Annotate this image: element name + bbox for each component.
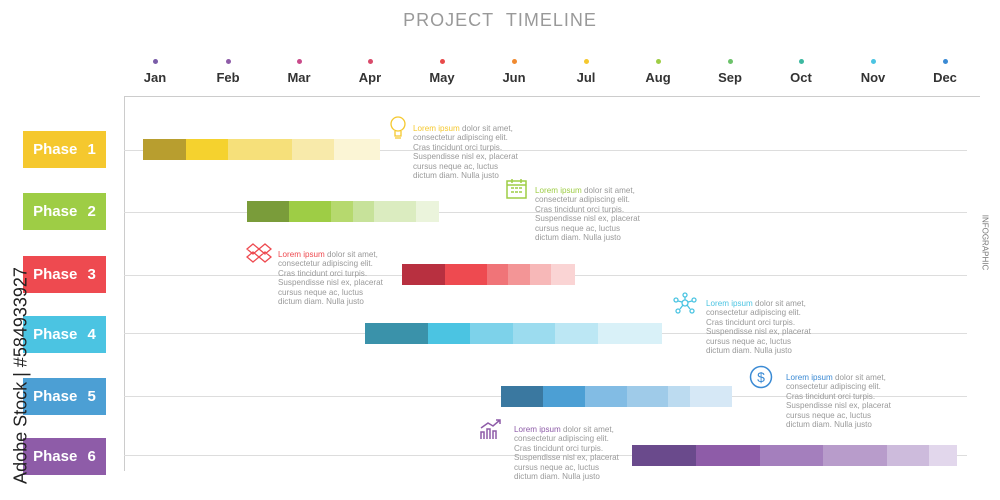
text phase 6: cursus neque ac, luctus: [514, 463, 599, 472]
month header: Feb: [216, 70, 240, 85]
month header: Mar: [287, 70, 311, 85]
month header: Aug: [645, 70, 671, 85]
phase 6 label: Phase 6: [33, 448, 96, 465]
text phase 2: Suspendisse nisl ex, placerat: [535, 214, 640, 223]
phase 3 label: Phase 3: [33, 266, 96, 283]
phase 4 label: Phase 4: [33, 326, 96, 343]
text phase 1: Cras tincidunt orci turpis.: [413, 143, 502, 152]
text phase 4: Suspendisse nisl ex, placerat: [706, 327, 811, 336]
text phase 1: Suspendisse nisl ex, placerat: [413, 152, 518, 161]
text phase 4: Cras tincidunt orci turpis.: [706, 318, 795, 327]
month header: Jan: [144, 70, 166, 85]
month header: Nov: [861, 70, 885, 85]
text phase 2: [535, 186, 640, 242]
text phase 3: consectetur adipiscing elit.: [278, 259, 373, 268]
text phase 6: Cras tincidunt orci turpis.: [514, 444, 603, 453]
text phase 1: [413, 124, 518, 180]
text phase 1: consectetur adipiscing elit.: [413, 133, 508, 142]
text phase 3: cursus neque ac, luctus: [278, 288, 363, 297]
icon: bulb: [390, 116, 406, 139]
side label: INFOGRAPHIC: [980, 215, 990, 270]
text phase 6: dictum diam. Nulla justo: [514, 472, 600, 481]
title: PROJECT TIMELINE: [403, 10, 597, 30]
text phase 3: Cras tincidunt orci turpis.: [278, 269, 367, 278]
text phase 4: consectetur adipiscing elit.: [706, 308, 801, 317]
text phase 4: [706, 299, 811, 355]
text phase 2: cursus neque ac, luctus: [535, 224, 620, 233]
text phase 4: Lorem ipsum dolor sit amet,: [706, 299, 806, 308]
text phase 5: cursus neque ac, luctus: [786, 411, 871, 420]
text phase 6: Suspendisse nisl ex, placerat: [514, 453, 619, 462]
text phase 5: dictum diam. Nulla justo: [786, 420, 872, 429]
text phase 2: Cras tincidunt orci turpis.: [535, 205, 624, 214]
text phase 2: consectetur adipiscing elit.: [535, 195, 630, 204]
text phase 2: Lorem ipsum dolor sit amet,: [535, 186, 635, 195]
icon: chart: [480, 419, 501, 439]
text phase 5: consectetur adipiscing elit.: [786, 382, 881, 391]
icon: network: [673, 292, 697, 314]
phase 1 label: Phase 1: [33, 141, 96, 158]
month header: Oct: [790, 70, 812, 85]
phase 1 label: [23, 131, 106, 168]
month header: Dec: [933, 70, 957, 85]
month header: Sep: [718, 70, 742, 85]
bar phase 1: [143, 139, 380, 160]
phase 2 label: [23, 193, 106, 230]
month header: Apr: [359, 70, 381, 85]
text phase 5: [786, 373, 891, 429]
icon: boxes: [246, 243, 272, 263]
month header: Jul: [577, 70, 595, 85]
bar phase 3: [402, 264, 575, 285]
bar phase 5: [501, 386, 732, 407]
watermark text: Adobe Stock | #584933927: [10, 267, 30, 484]
month header: Jun: [502, 70, 526, 85]
phase labels: [23, 131, 106, 475]
bar phase 4: [365, 323, 662, 344]
text phase 5: Lorem ipsum dolor sit amet,: [786, 373, 886, 382]
phase 5 label: [23, 378, 106, 415]
phase 2 label: Phase 2: [33, 203, 96, 220]
text phase 3: Lorem ipsum dolor sit amet,: [278, 250, 378, 259]
text phase 2: dictum diam. Nulla justo: [535, 233, 621, 242]
text phase 5: Suspendisse nisl ex, placerat: [786, 401, 891, 410]
text phase 3: Suspendisse nisl ex, placerat: [278, 278, 383, 287]
phase 3 label: [23, 256, 106, 293]
icon: dollar: [750, 366, 772, 388]
bar phase 6: [632, 445, 957, 466]
text phase 5: Cras tincidunt orci turpis.: [786, 392, 875, 401]
icon: dollar: $: [757, 369, 765, 385]
bar phase 2: [247, 201, 439, 222]
icon: calendar: [506, 179, 527, 199]
text phase 4: dictum diam. Nulla justo: [706, 346, 792, 355]
month header: [144, 59, 957, 85]
text phase 1: cursus neque ac, luctus: [413, 162, 498, 171]
phase 5 label: Phase 5: [33, 388, 96, 405]
text phase 4: cursus neque ac, luctus: [706, 337, 791, 346]
text phase 3: dictum diam. Nulla justo: [278, 297, 364, 306]
text phase 1: dictum diam. Nulla justo: [413, 171, 499, 180]
text phase 3: [278, 250, 383, 306]
phase 4 label: [23, 316, 106, 353]
text phase 6: Lorem ipsum dolor sit amet,: [514, 425, 614, 434]
text phase 6: consectetur adipiscing elit.: [514, 434, 609, 443]
text phase 1: Lorem ipsum dolor sit amet,: [413, 124, 513, 133]
month header: May: [429, 70, 455, 85]
phase 6 label: [23, 438, 106, 475]
text phase 6: [514, 425, 619, 481]
